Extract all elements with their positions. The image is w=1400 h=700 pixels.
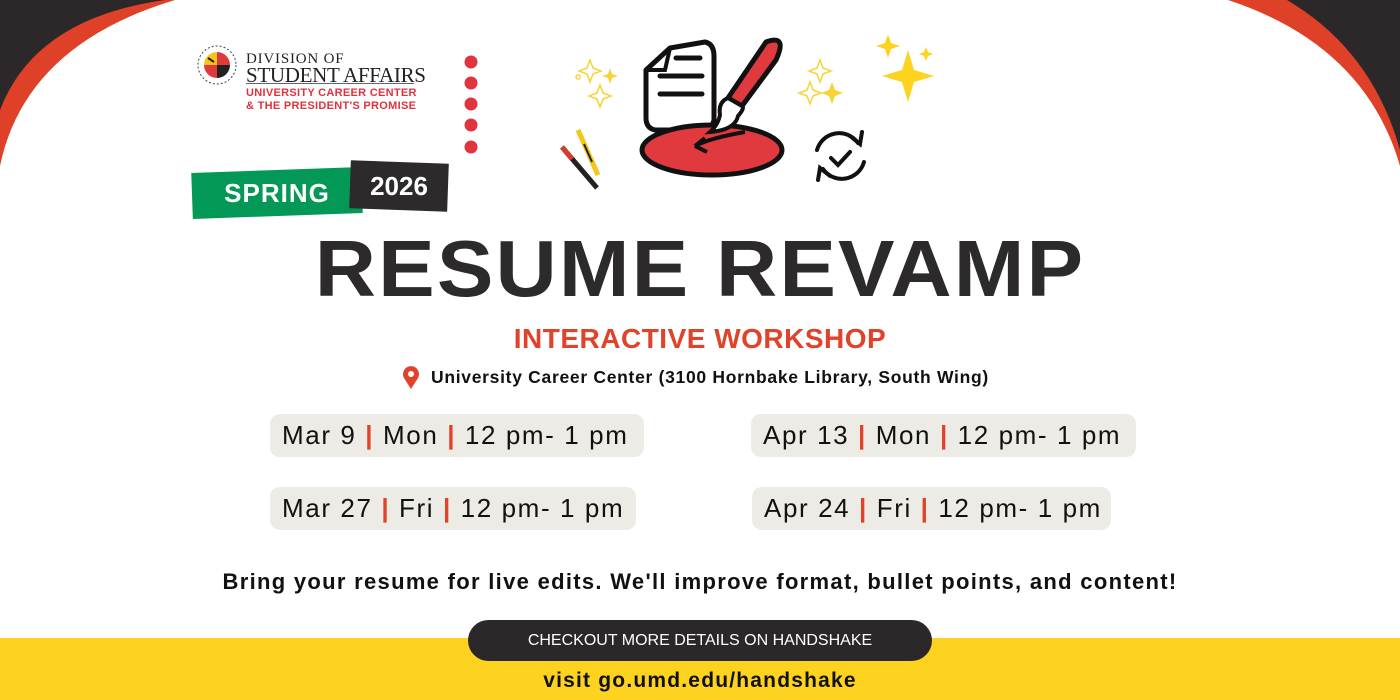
button: handshake [468,620,932,661]
date pill 4 [752,487,1111,530]
illustration: document and paintbrush [560,34,934,190]
date pill 3: Mar 27 | Fri | 12 pm- 1 pm [282,493,624,523]
sparkles right [799,60,831,104]
date pill 4: Apr 24 | Fri | 12 pm- 1 pm [764,493,1102,523]
title: RESUME REVAMP [315,224,1085,313]
logo: UMD Division of Student Affairs [198,46,426,112]
footer link text: visit go.umd.edu/handshake [543,669,857,692]
button: handshake: CHECKOUT MORE DETAILS ON HANDSHAKE [528,632,872,649]
icon: refresh check [817,132,864,180]
badge: spring 2026 [191,160,449,219]
subtitle: INTERACTIVE WORKSHOP [514,323,886,354]
icon: map pin [403,366,419,389]
footer band [0,638,1400,700]
red dots [464,56,478,154]
pens [562,147,597,188]
badge: spring 2026: 2026 [370,171,428,201]
document [646,42,714,130]
logo: UMD Division of Student Affairs: UNIVERSITY CAREER CENTER [246,87,417,99]
logo: UMD Division of Student Affairs: STUDENT AFFAIRS [246,63,426,87]
corner decoration right [1228,0,1400,166]
text: division name: DIVISION OF [246,51,344,67]
badge: spring 2026: SPRING [224,178,330,208]
corner decoration left [0,0,175,166]
sparkles left [576,60,611,107]
date pill 2 [751,414,1136,457]
logo: UMD Division of Student Affairs: & THE PRESIDENT'S PROMISE [246,100,416,112]
location line: University Career Center (3100 Hornbake Library, South Wing) [431,367,989,387]
date pill 2: Apr 13 | Mon | 12 pm- 1 pm [763,420,1121,450]
paint puddle [642,125,782,175]
date pill 1: Mar 9 | Mon | 12 pm- 1 pm [282,420,628,450]
description text: Bring your resume for live edits. We'll improve format, bullet points, and content! [223,569,1177,594]
brush [728,40,780,106]
date pill 1 [270,414,644,457]
date pill 3 [270,487,636,530]
icon: UMD seal [198,46,236,84]
